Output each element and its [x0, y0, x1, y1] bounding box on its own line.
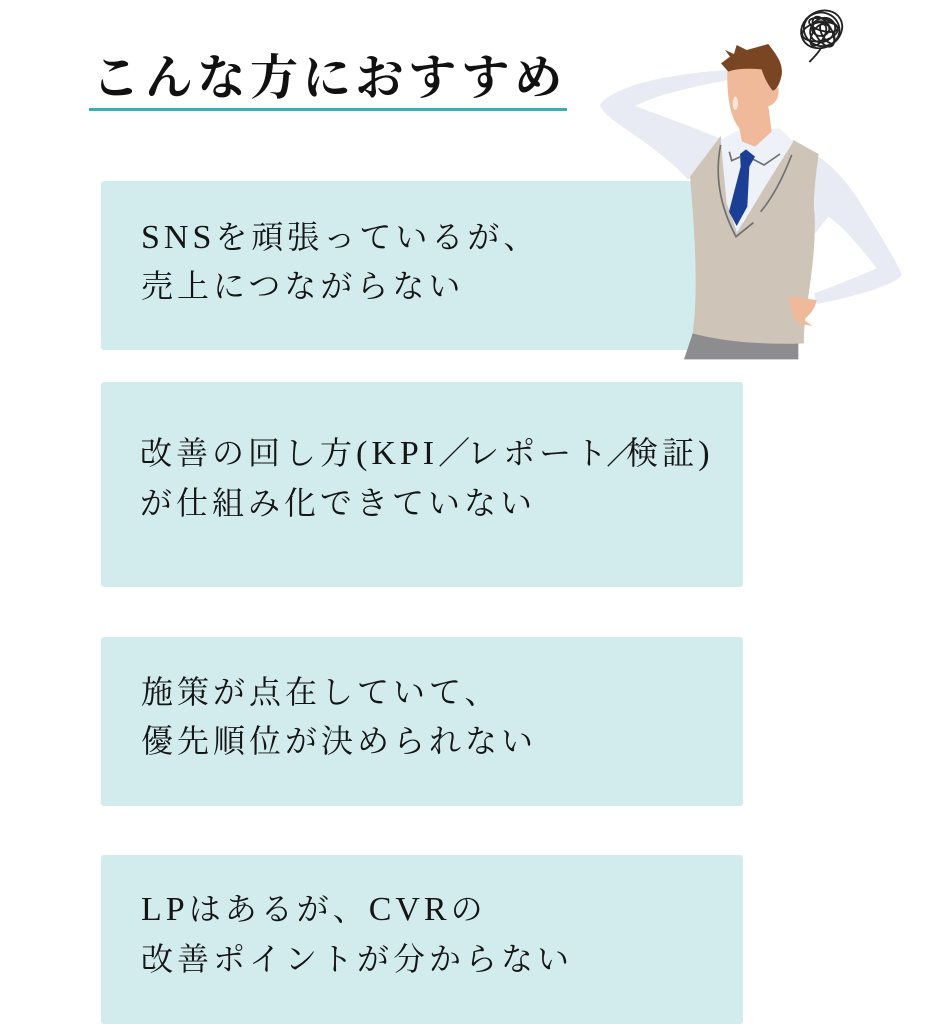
collar and vest trim	[718, 145, 792, 237]
text: priorities line 1: 施策が点在していて、	[141, 674, 500, 710]
panel: improvement cycle	[101, 382, 743, 587]
face highlight	[733, 97, 738, 110]
neck and face	[727, 67, 779, 147]
hand	[790, 297, 817, 326]
icon: worried man illustration	[600, 10, 902, 360]
text: SNS line 1: SNSを頑張っているが、	[141, 219, 539, 256]
title: こんな方におすすめ	[92, 52, 567, 105]
text: SNS line 2: 売上につながらない	[141, 268, 464, 304]
text: priorities line 2: 優先順位が決められない	[141, 723, 537, 759]
right arm	[813, 155, 902, 304]
trousers	[684, 333, 798, 359]
hair	[721, 44, 782, 91]
scribble	[794, 3, 849, 62]
text: improvement line 2: が仕組み化できていない	[140, 485, 536, 521]
shirt	[721, 128, 793, 232]
text: LP line 2: 改善ポイントが分からない	[141, 941, 573, 977]
text: LP line 1: LPはあるが、CVRの	[141, 891, 487, 928]
panel: SNS	[101, 181, 743, 350]
raised arm	[600, 70, 728, 180]
panel: priorities	[101, 637, 743, 806]
title underline	[89, 108, 567, 111]
panel: LP	[101, 855, 743, 1024]
tie	[729, 149, 755, 226]
vest	[690, 136, 819, 344]
text: improvement line 1: 改善の回し方(KPI／レポート／検証)	[140, 435, 714, 472]
